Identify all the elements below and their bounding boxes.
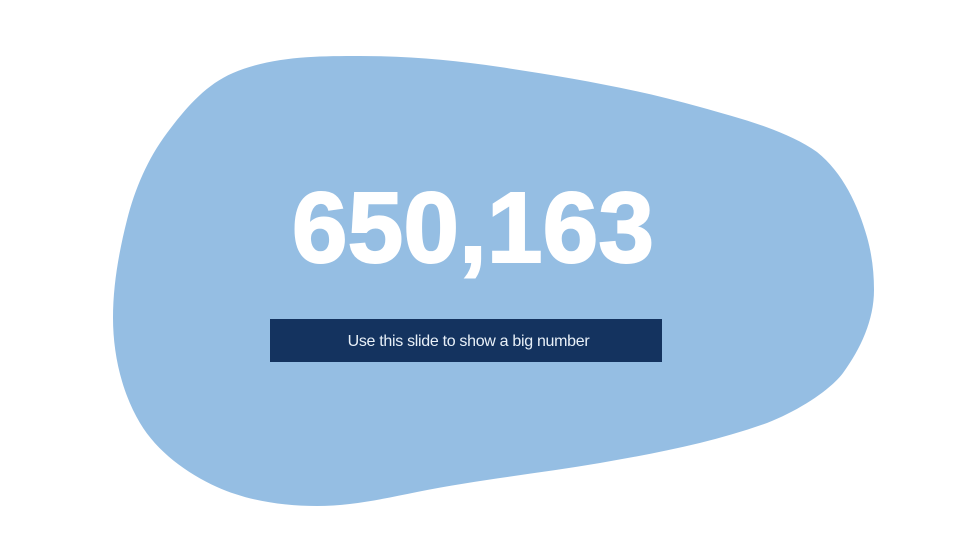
big number: 650,163 — [292, 172, 654, 284]
caption bar — [270, 319, 662, 362]
caption bar: Use this slide to show a big number — [348, 333, 589, 350]
